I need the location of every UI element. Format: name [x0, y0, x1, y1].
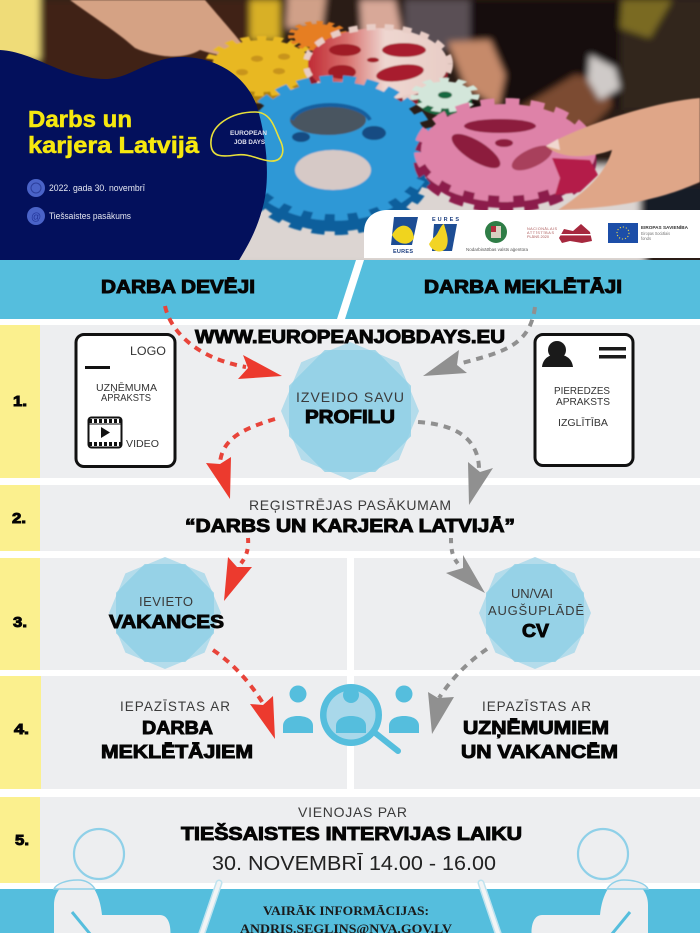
text: meet companies: IEPAZĪSTAS AR — [482, 699, 591, 714]
logo strip — [364, 210, 700, 258]
gear: crimson tooth — [552, 158, 598, 195]
logo: state agency crest — [466, 221, 528, 253]
logo: national plan — [527, 224, 592, 243]
text: agree on interview time: 30. NOVEMBRĪ 14.00 - 16.00 — [212, 852, 496, 875]
icon: video film strip — [88, 418, 122, 448]
text: meet job seekers: IEPAZĪSTAS AR — [120, 699, 230, 714]
logo: European Job Days outline: EUROPEAN — [230, 130, 267, 137]
text: meet companies — [461, 699, 618, 762]
logo: EURES 1: EURES — [393, 249, 413, 255]
gear: red and white — [306, 27, 450, 110]
gear: yellow — [210, 39, 314, 103]
logo: national plan: ATTĪSTĪBAS — [527, 231, 554, 235]
photo: hands joining gears — [0, 0, 700, 270]
logo: EU flag — [608, 223, 689, 243]
arrow: registration to CV — [446, 538, 485, 593]
text: register for event — [185, 497, 515, 536]
logo: national plan: PLĀNS 2020 — [527, 235, 549, 239]
text: meet companies: UN VAKANCĒM — [461, 742, 618, 762]
text: meet job seekers: MEKLĒTĀJIEM — [101, 742, 253, 762]
text: register for event: REĢISTRĒJAS PASĀKUMAM — [249, 497, 451, 513]
arrow: employers to profile — [165, 306, 282, 379]
event format: Tiešsaistes pasākums — [49, 211, 131, 221]
text: register for event: “DARBS UN KARJERA LATVIJĀ” — [185, 516, 515, 536]
gear: orange — [292, 23, 344, 49]
text: upload CV — [488, 586, 584, 641]
text: upload CV: UN/VAI — [511, 586, 553, 601]
logo: EU flag: Eiropas Sociālais — [641, 231, 671, 236]
step numbers: 5. — [15, 832, 29, 849]
text: post vacancies: VAKANCES — [109, 612, 224, 632]
text: meet job seekers: DARBA — [142, 718, 213, 738]
card: job seeker profile: PIEREDZES — [554, 386, 610, 397]
card: job seeker profile — [535, 334, 633, 466]
arrow: job seekers to profile — [423, 307, 535, 376]
step numbers: 3. — [13, 614, 27, 631]
hand: upper left — [70, 0, 247, 56]
arrow: CV to companies — [428, 649, 487, 734]
arrow: vacancies to job seekers — [213, 650, 275, 739]
text: post vacancies — [109, 594, 224, 632]
logo: EURES 1 — [391, 217, 418, 255]
title — [28, 106, 199, 158]
event format: @ — [31, 212, 41, 223]
contact information — [240, 903, 453, 933]
step numbers: 1. — [13, 393, 27, 410]
hand: fingertip on pink gear — [546, 98, 700, 210]
panel: header banner — [0, 0, 700, 270]
logo: EURES 2 — [429, 217, 459, 251]
card: employer profile: VIDEO — [126, 438, 159, 450]
event date — [27, 179, 145, 197]
arrow: registration to vacancies — [224, 538, 252, 601]
badge: create profile — [264, 325, 436, 497]
step numbers — [12, 393, 29, 849]
card: employer profile — [76, 334, 175, 466]
logo: EURES 2: EURES — [432, 217, 459, 223]
text: meet job seekers — [101, 699, 253, 762]
figure: left person — [54, 829, 219, 933]
website address: WWW.EUROPEANJOBDAYS.EU — [195, 327, 505, 347]
logo: EU flag: fonds — [641, 236, 652, 241]
arrow: profile to employer registration — [206, 419, 275, 499]
gear: blue — [239, 79, 431, 232]
card: employer profile: UZŅĒMUMA — [96, 382, 157, 394]
text: agree on interview time — [181, 804, 522, 875]
text: create your profile: PROFILU — [305, 407, 395, 427]
logo: national plan: NACIONĀLAIS — [527, 227, 557, 231]
heading: employers: DARBA DEVĒJI — [101, 277, 255, 297]
figure: right person — [481, 829, 648, 933]
logo: European Job Days outline: JOB DAYS — [234, 139, 266, 146]
badge: post vacancies — [96, 544, 234, 682]
shape: navy blob — [0, 50, 267, 262]
icon: people and magnifier — [283, 684, 419, 751]
contact information: VAIRĀK INFORMĀCIJAS: — [263, 903, 429, 918]
text: post vacancies: IEVIETO — [139, 594, 193, 609]
gear: green — [415, 80, 475, 116]
logo: European Job Days outline — [211, 112, 283, 161]
card: employer profile: APRAKSTS — [101, 393, 151, 404]
logo: state agency crest: Nodarbinātības valsts aģentūra — [466, 246, 528, 253]
step numbers: 4. — [14, 721, 29, 738]
text: create your profile — [296, 389, 404, 427]
text: create your profile: IZVEIDO SAVU — [296, 389, 404, 405]
step numbers: 2. — [12, 510, 26, 527]
section backgrounds — [0, 260, 700, 933]
arrow: profile to seeker registration — [418, 422, 493, 505]
title: Darbs un — [28, 106, 132, 132]
logo: EU flag: EIROPAS SAVIENĪBA — [641, 224, 689, 230]
text: agree on interview time: VIENOJAS PAR — [298, 804, 407, 820]
event date: 2022. gada 30. novembrī — [49, 183, 145, 193]
icon: person — [542, 341, 573, 367]
event format — [27, 207, 131, 225]
card: job seeker profile: APRAKSTS — [556, 397, 610, 408]
text: meet companies: UZŅĒMUMIEM — [463, 718, 609, 738]
text: upload CV: CV — [522, 621, 549, 641]
card: job seeker profile: IZGLĪTĪBA — [558, 417, 608, 429]
gear: pink — [418, 102, 592, 208]
illustration: interview figures — [54, 829, 648, 933]
badge: upload CV — [466, 544, 604, 682]
heading: job seekers: DARBA MEKLĒTĀJI — [424, 277, 622, 297]
text: agree on interview time: TIEŠSAISTES INTERVIJAS LAIKU — [181, 823, 522, 844]
text: upload CV: AUGŠUPLĀDĒ — [488, 603, 584, 618]
title: karjera Latvijā — [28, 132, 199, 158]
card: employer profile: LOGO — [130, 344, 166, 358]
